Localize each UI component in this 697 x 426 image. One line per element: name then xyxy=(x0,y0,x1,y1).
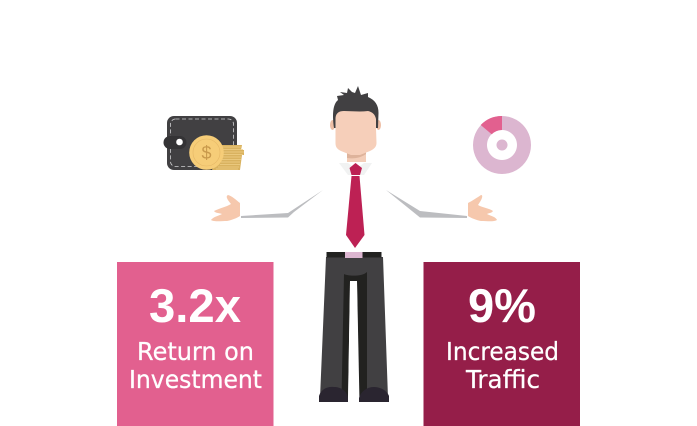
stat: 9%: 9% xyxy=(468,279,536,332)
face xyxy=(336,111,376,155)
right shoe xyxy=(359,387,389,402)
neck xyxy=(347,150,366,162)
label: return on investment: Investment xyxy=(129,365,262,394)
left arm xyxy=(241,190,323,218)
tie xyxy=(346,163,364,248)
label: increased traffic xyxy=(446,337,559,394)
left hand xyxy=(211,195,240,221)
label: return on investment: Return on xyxy=(137,337,254,366)
hair xyxy=(333,86,378,128)
stat: 3.2x: 3.2x xyxy=(149,279,241,332)
collar xyxy=(339,163,372,175)
belt xyxy=(326,252,382,258)
ears xyxy=(330,120,335,130)
icon: donut chart xyxy=(473,116,531,174)
label: increased traffic: Increased xyxy=(446,337,559,366)
gold coin: $ xyxy=(201,143,212,163)
coin stack xyxy=(212,145,244,170)
figure: businessman xyxy=(211,86,497,402)
label: return on investment xyxy=(129,337,262,394)
panel: increased traffic xyxy=(424,262,580,426)
icon: wallet with coins xyxy=(164,116,244,170)
panel: return on investment xyxy=(117,262,274,426)
label: increased traffic: Traffic xyxy=(465,365,540,394)
left shoe xyxy=(319,387,348,402)
right hand xyxy=(468,195,497,221)
right arm xyxy=(386,190,467,218)
trousers xyxy=(320,257,388,402)
